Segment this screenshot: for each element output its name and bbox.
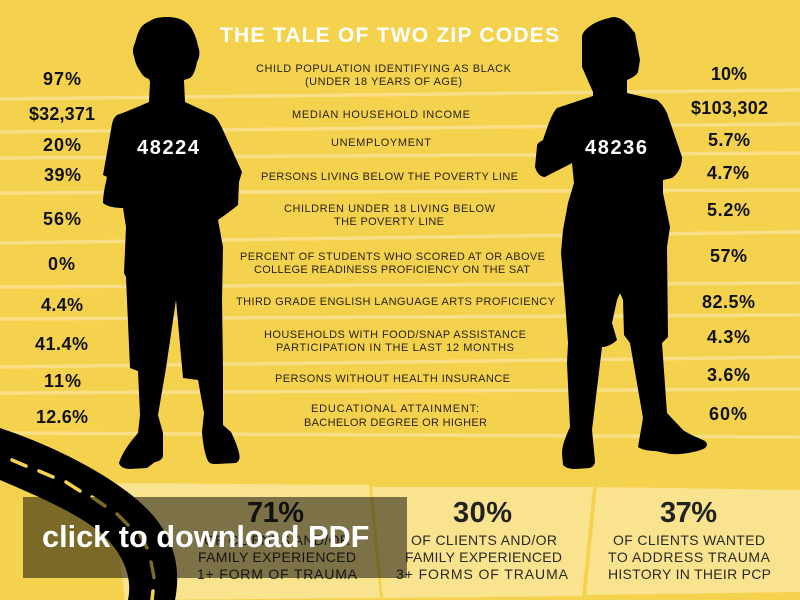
- label: child poverty: CHILDREN UNDER 18 LIVING BELOW: [284, 203, 496, 215]
- stat: 30%: FAMILY EXPERIENCED: [405, 549, 562, 565]
- stat: 71%: OF CLIENTS AND/OR: [204, 532, 350, 548]
- road illustration: [0, 428, 177, 600]
- indicator labels: [236, 63, 556, 429]
- values column: 48236: 4.7%: [707, 163, 749, 183]
- download overlay: [23, 497, 407, 578]
- stat: 71%: 1+ FORM OF TRAUMA: [197, 566, 358, 582]
- stat: 37%: TO ADDRESS TRAUMA: [608, 549, 771, 565]
- label: unemployment: UNEMPLOYMENT: [331, 137, 431, 149]
- label: poverty: PERSONS LIVING BELOW THE POVERTY LINE: [261, 171, 518, 183]
- label: education: BACHELOR DEGREE OR HIGHER: [304, 417, 487, 429]
- stat: 71%: 71%: [247, 497, 304, 529]
- values column: 48224: 0%: [48, 254, 75, 274]
- label: education: EDUCATIONAL ATTAINMENT:: [311, 403, 479, 415]
- title: THE TALE OF TWO ZIP CODES: [220, 24, 559, 47]
- stat: 71%: [197, 497, 358, 582]
- stat: 71%: FAMILY EXPERIENCED: [198, 549, 356, 565]
- label: child poverty: [284, 203, 496, 228]
- values column: 48236: $103,302: [691, 98, 768, 118]
- label: SAT: COLLEGE READINESS PROFICIENCY ON THE SAT: [254, 264, 530, 276]
- values column: 48224: 41.4%: [35, 334, 88, 354]
- panel: 71% background: [110, 483, 380, 600]
- zip label 48236: 48236: [585, 137, 647, 159]
- label: third grade: THIRD GRADE ENGLISH LANGUAGE ARTS PROFICIENCY: [236, 296, 556, 308]
- label: SAT: PERCENT OF STUDENTS WHO SCORED AT OR ABOVE: [240, 251, 545, 263]
- label: SNAP: PARTICIPATION IN THE LAST 12 MONTHS: [276, 342, 514, 354]
- values column: 48224: 97%: [43, 69, 81, 89]
- panel: 30% background: [372, 487, 593, 598]
- values column: 48236: 82.5%: [702, 292, 755, 312]
- values column: 48224: 11%: [44, 371, 81, 391]
- label: SAT: [240, 251, 545, 276]
- stat: 37%: 37%: [660, 497, 717, 529]
- values column: 48224: 12.6%: [36, 407, 88, 427]
- values column: 48224: 20%: [43, 135, 81, 155]
- values column: 48224: [29, 69, 95, 427]
- values column: 48224: 4.4%: [41, 295, 83, 315]
- stat: 30%: [396, 497, 569, 582]
- stat: 30%: OF CLIENTS AND/OR: [411, 532, 557, 548]
- label: child population: [256, 63, 512, 88]
- values column: 48236: 10%: [711, 64, 747, 84]
- label: education: [304, 403, 487, 429]
- values column: 48236: 60%: [709, 404, 747, 424]
- stat: 37%: OF CLIENTS WANTED: [613, 532, 765, 548]
- silhouette: child 48236: [535, 17, 707, 469]
- label: child population: (UNDER 18 YEARS OF AGE): [305, 76, 462, 88]
- values column: 48236: 4.3%: [707, 327, 750, 347]
- stat: 37%: [608, 497, 771, 582]
- values column: 48236: 57%: [710, 246, 747, 266]
- values column: 48224: 56%: [43, 209, 81, 229]
- label: child population: CHILD POPULATION IDENTIFYING AS BLACK: [256, 63, 512, 75]
- label: insurance: PERSONS WITHOUT HEALTH INSURANCE: [275, 373, 510, 385]
- panel: 37% background: [586, 487, 800, 595]
- values column: 48236: 3.6%: [707, 365, 750, 385]
- label: child poverty: THE POVERTY LINE: [334, 216, 444, 228]
- values column: 48236: 5.7%: [708, 130, 750, 150]
- values column: 48224: 39%: [44, 165, 81, 185]
- label: SNAP: [264, 329, 526, 354]
- values column: 48236: [691, 64, 768, 424]
- zip label 48224: 48224: [137, 137, 200, 159]
- label: SNAP: HOUSEHOLDS WITH FOOD/SNAP ASSISTANCE: [264, 329, 526, 341]
- values column: 48236: 5.2%: [707, 200, 750, 220]
- stat: 30%: 30%: [453, 497, 512, 529]
- download overlay: click to download PDF: [42, 519, 369, 554]
- stat: 30%: 3+ FORMS OF TRAUMA: [396, 566, 569, 582]
- label: income: MEDIAN HOUSEHOLD INCOME: [292, 109, 470, 121]
- silhouette: child 48224: [103, 17, 242, 469]
- values column: 48224: $32,371: [29, 104, 95, 124]
- stat: 37%: HISTORY IN THEIR PCP: [608, 566, 771, 582]
